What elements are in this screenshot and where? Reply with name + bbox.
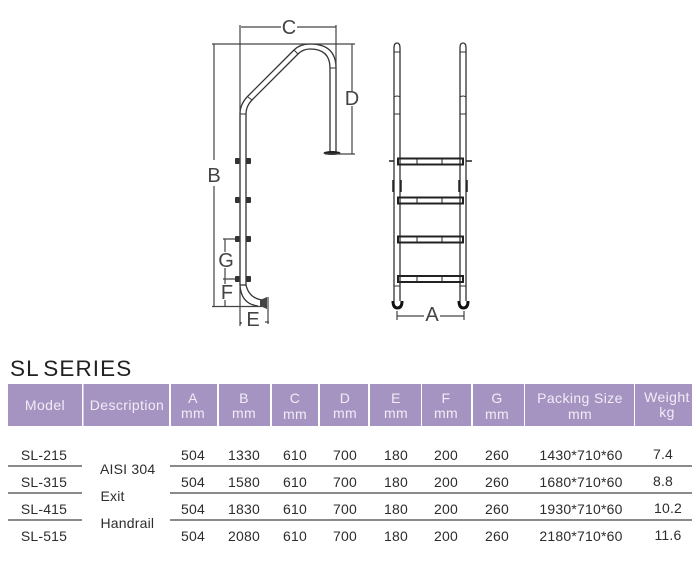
row SL-415: 700 — [333, 501, 357, 517]
row SL-315: 504 — [181, 474, 205, 490]
row SL-215: 504 — [181, 447, 205, 463]
row SL-215: 7.4 — [653, 446, 673, 462]
row SL-515: SL-515 — [21, 528, 67, 544]
row SL-415: 504 — [181, 501, 205, 517]
row SL-415: 200 — [434, 501, 458, 517]
row SL-415 — [21, 500, 682, 517]
row SL-515: 260 — [485, 528, 509, 544]
side brackets — [389, 161, 472, 192]
row SL-215: 610 — [283, 447, 307, 463]
row SL-315: 180 — [384, 474, 408, 490]
row SL-215: 200 — [434, 447, 458, 463]
description cell: AISI 304 — [100, 461, 155, 477]
row SL-315 — [21, 473, 673, 490]
table header — [8, 384, 692, 426]
table header: A — [188, 390, 198, 406]
row SL-215: 1330 — [228, 447, 260, 463]
dimension letters: G — [218, 250, 234, 272]
front view ladder diagram — [389, 43, 472, 326]
handrail tube — [240, 44, 336, 285]
description cell: Exit — [100, 488, 125, 504]
row SL-315: 1680*710*60 — [539, 474, 623, 490]
table header: mm — [434, 405, 458, 421]
table header: B — [239, 390, 249, 406]
row SL-215: 1430*710*60 — [539, 447, 623, 463]
row SL-215: 260 — [485, 447, 509, 463]
row SL-215: SL-215 — [21, 447, 67, 463]
table header: Model — [25, 397, 65, 413]
table header: E — [391, 390, 401, 406]
row SL-315: 1580 — [228, 474, 260, 490]
row SL-415: 1830 — [228, 501, 260, 517]
row SL-315: 200 — [434, 474, 458, 490]
table header: mm — [283, 406, 307, 422]
table header: mm — [181, 405, 205, 421]
row SL-315: 260 — [485, 474, 509, 490]
feet — [393, 301, 468, 308]
dimension lines — [212, 25, 355, 326]
table header: mm — [485, 406, 509, 422]
row SL-515: 700 — [333, 528, 357, 544]
row SL-515: 504 — [181, 528, 205, 544]
table header: D — [340, 390, 350, 406]
table header: Description — [90, 397, 164, 413]
table header: F — [442, 390, 450, 406]
table header: Packing Size — [537, 390, 623, 406]
row SL-415: 10.2 — [654, 500, 682, 516]
row SL-415: SL-415 — [21, 501, 67, 517]
dimension letters: B — [207, 165, 221, 187]
title: SL SERIES — [10, 356, 132, 381]
steps — [398, 158, 463, 283]
step bolts — [235, 158, 251, 282]
row SL-415: 1930*710*60 — [539, 501, 623, 517]
wall flange — [240, 285, 267, 309]
dimension letters: D — [345, 88, 359, 110]
row SL-415: 260 — [485, 501, 509, 517]
row SL-315: 8.8 — [653, 473, 673, 489]
table header: kg — [659, 404, 675, 420]
table header: mm — [333, 405, 357, 421]
row SL-415: 180 — [384, 501, 408, 517]
table header: mm — [232, 405, 256, 421]
row SL-515: 2180*710*60 — [539, 528, 623, 544]
row SL-515: 11.6 — [654, 527, 682, 543]
row SL-415: 610 — [283, 501, 307, 517]
dimension letters — [207, 17, 359, 331]
row SL-515: 610 — [283, 528, 307, 544]
dimension letters: E — [246, 309, 260, 331]
rails — [394, 43, 466, 301]
row SL-515: 180 — [384, 528, 408, 544]
description cell — [100, 461, 155, 531]
row SL-315: SL-315 — [21, 474, 67, 490]
floor anchor — [324, 151, 340, 155]
dimension A — [397, 304, 464, 326]
table header: mm — [384, 405, 408, 421]
row SL-515 — [21, 527, 682, 544]
row SL-215: 180 — [384, 447, 408, 463]
side view ladder diagram — [207, 17, 359, 331]
row separators — [8, 466, 692, 520]
row SL-215 — [21, 446, 673, 463]
row SL-215: 700 — [333, 447, 357, 463]
table header: C — [290, 390, 300, 406]
row SL-515: 200 — [434, 528, 458, 544]
row SL-515: 2080 — [228, 528, 260, 544]
dimension letters: C — [282, 17, 296, 39]
row SL-315: 700 — [333, 474, 357, 490]
table header: G — [491, 390, 503, 406]
dimension letters: F — [221, 282, 233, 304]
row SL-315: 610 — [283, 474, 307, 490]
table header: Weight — [644, 389, 690, 405]
description cell: Handrail — [100, 515, 154, 531]
dimension A: A — [425, 304, 439, 326]
table header: mm — [568, 406, 592, 422]
